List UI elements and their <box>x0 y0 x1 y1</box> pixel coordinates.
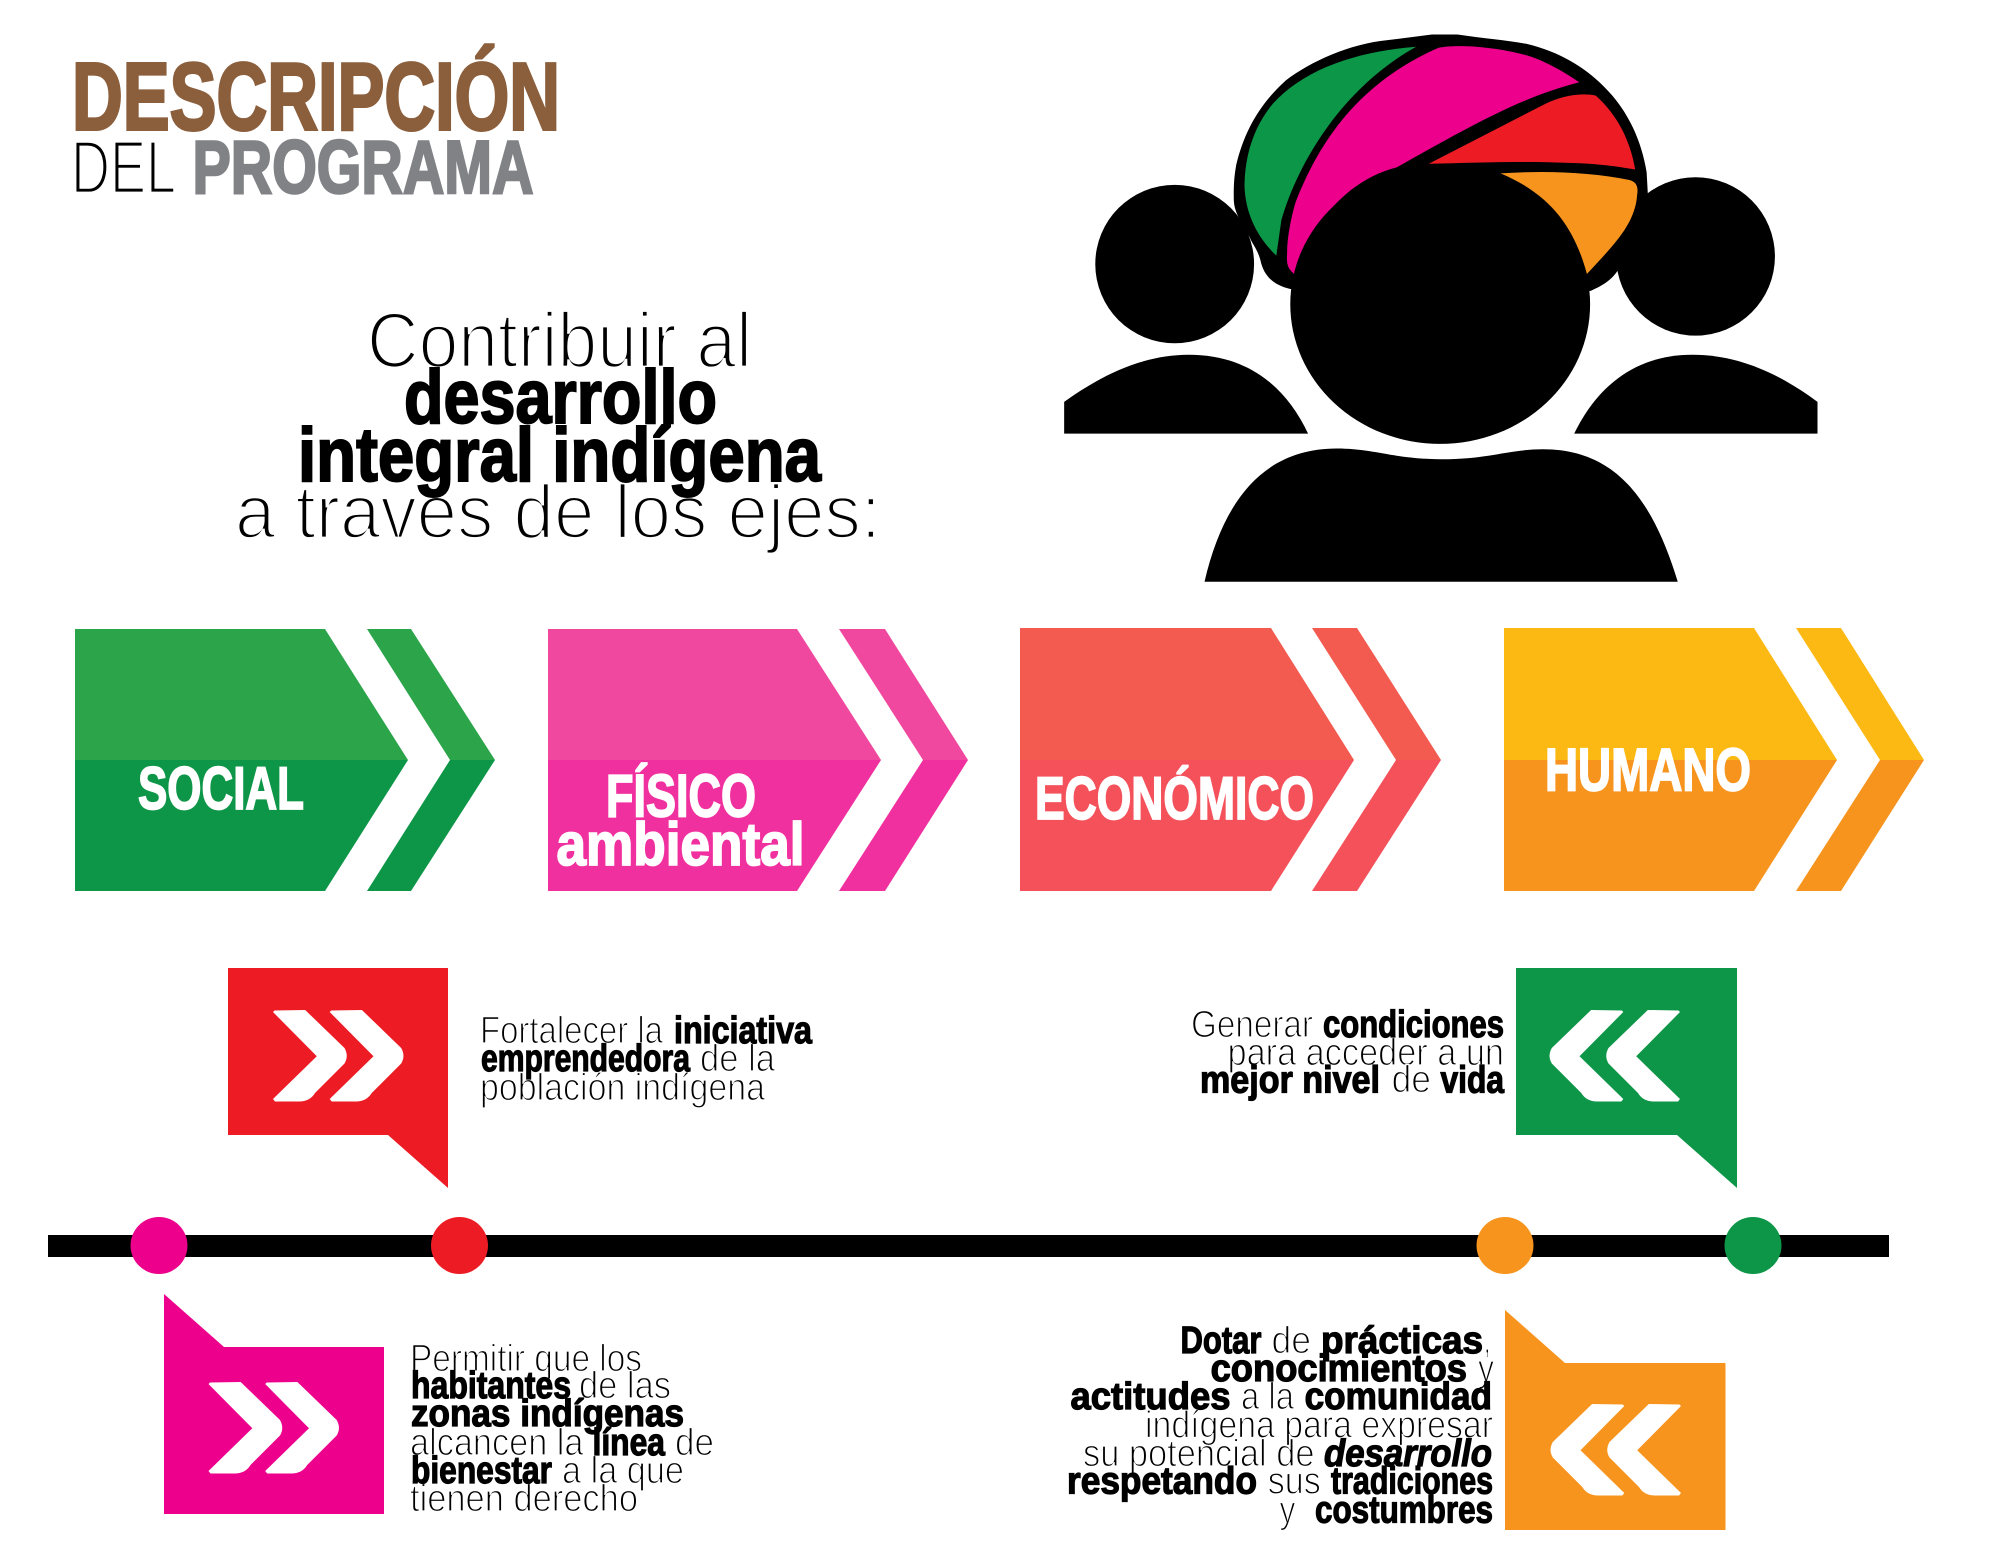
text: generar condiciones: mejor nivel <box>1200 1060 1380 1102</box>
text: dotar de prácticas: tradiciones <box>1331 1460 1493 1502</box>
text: permitir que los habitantes: habitantes <box>411 1365 571 1407</box>
text: permitir que los habitantes: de <box>675 1422 714 1464</box>
text: dotar de prácticas: de <box>1272 1320 1311 1362</box>
callout: red speech bubble <box>228 968 448 1188</box>
chevron: físico ambiental <box>548 629 968 891</box>
subtitle: contribuir al desarrollo integral indígena: Contribuir al <box>367 296 752 384</box>
icon: three people with coloured turban <box>1064 34 1818 582</box>
chevron: social <box>75 629 495 891</box>
text: dotar de prácticas: y <box>1280 1490 1295 1532</box>
text: dotar de prácticas: a la <box>1241 1376 1295 1418</box>
text: generar condiciones: para acceder a un <box>1228 1032 1504 1074</box>
chevron: físico ambiental: FÍSICO <box>606 763 756 830</box>
text: generar condiciones <box>1191 1004 1505 1102</box>
text: generar condiciones: Generar <box>1191 1004 1313 1046</box>
title: Descripción del Programa: DESCRIPCIÓN <box>72 44 560 150</box>
text: dotar de prácticas: sus <box>1268 1460 1321 1502</box>
chevron: humano: HUMANO <box>1545 737 1751 804</box>
subtitle: contribuir al desarrollo integral indígena: integral indígena <box>298 413 822 498</box>
text: generar condiciones: condiciones <box>1323 1004 1504 1046</box>
text: generar condiciones: vida <box>1440 1060 1505 1102</box>
text: fortalecer la iniciativa: Fortalecer la <box>480 1010 664 1052</box>
text: fortalecer la iniciativa: de la <box>700 1038 776 1080</box>
text: dotar de prácticas: desarrollo <box>1324 1433 1492 1475</box>
callout: orange speech bubble <box>1505 1310 1726 1530</box>
text: fortalecer la iniciativa <box>480 1010 813 1109</box>
text: permitir que los habitantes <box>410 1338 714 1520</box>
text: dotar de prácticas: comunidad <box>1305 1376 1492 1418</box>
text: generar condiciones: de <box>1392 1059 1431 1101</box>
text: dotar de prácticas: costumbres <box>1315 1490 1493 1532</box>
timeline with four dots <box>48 1217 1889 1274</box>
text: permitir que los habitantes: bienestar <box>411 1450 552 1492</box>
text: permitir que los habitantes: tienen derecho <box>410 1478 638 1520</box>
text: dotar de prácticas: y <box>1478 1348 1494 1390</box>
text: permitir que los habitantes: de las <box>579 1365 671 1407</box>
chevron: social: SOCIAL <box>138 755 304 822</box>
text: dotar de prácticas: Dotar <box>1180 1320 1262 1362</box>
title: Descripción del Programa: DEL <box>71 125 176 209</box>
text: dotar de prácticas: conocimientos <box>1211 1348 1467 1390</box>
text: dotar de prácticas: respetando <box>1067 1460 1257 1502</box>
chevron: humano <box>1504 628 1924 891</box>
text: permitir que los habitantes: línea <box>592 1422 666 1464</box>
text: dotar de prácticas: su potencial de <box>1083 1433 1314 1475</box>
text: dotar de prácticas: actitudes <box>1070 1376 1230 1418</box>
title: Descripción del Programa: PROGRAMA <box>192 125 534 209</box>
text: permitir que los habitantes: zonas indígenas <box>411 1393 684 1435</box>
title: Descripción del Programa <box>71 44 560 209</box>
text: permitir que los habitantes: Permitir que los <box>410 1338 642 1380</box>
text: dotar de prácticas <box>1067 1320 1494 1532</box>
text: dotar de prácticas: , <box>1484 1320 1490 1362</box>
callout: pink speech bubble <box>164 1294 384 1514</box>
chevron: económico: ECONÓMICO <box>1035 765 1314 832</box>
text: dotar de prácticas: indígena para expresar <box>1145 1404 1493 1446</box>
chevron: económico <box>1020 628 1441 891</box>
chevron: físico ambiental: ambiental <box>556 811 804 878</box>
text: fortalecer la iniciativa: población indígena <box>480 1067 766 1109</box>
text: permitir que los habitantes: alcancen la <box>410 1422 584 1464</box>
text: fortalecer la iniciativa: emprendedora <box>481 1038 691 1080</box>
subtitle: contribuir al desarrollo integral indígena: a través de los ejes: <box>235 470 881 555</box>
subtitle: contribuir al desarrollo integral indígena <box>235 296 881 555</box>
text: permitir que los habitantes: a la que <box>562 1450 684 1492</box>
callout: green speech bubble <box>1516 968 1737 1188</box>
subtitle: contribuir al desarrollo integral indígena: desarrollo <box>404 355 717 440</box>
text: fortalecer la iniciativa: iniciativa <box>674 1010 813 1052</box>
text: dotar de prácticas: prácticas <box>1321 1320 1483 1362</box>
